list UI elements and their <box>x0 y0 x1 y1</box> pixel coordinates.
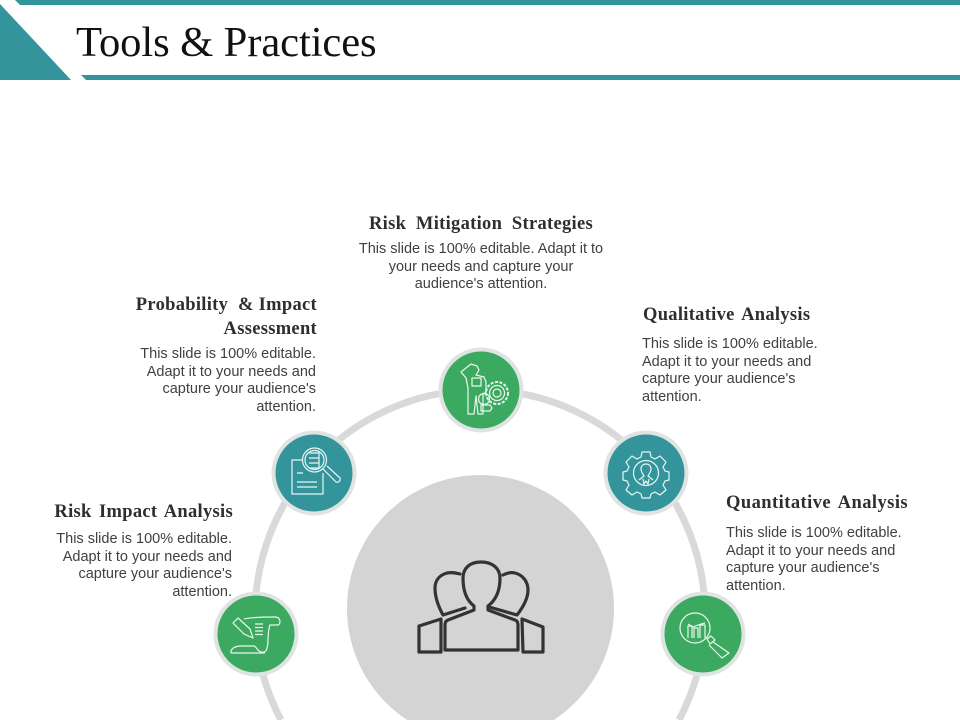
icon: person with gears <box>461 364 508 414</box>
label: risk impact analysis: Risk Impact Analysis <box>54 502 233 522</box>
header decoration <box>0 0 960 80</box>
label: probability and impact assessment: This slide is 100% editable. <box>140 346 316 362</box>
label: qualitative analysis <box>642 305 818 405</box>
label: risk mitigation strategies: audience's attention. <box>415 276 547 292</box>
icon: document with magnifier <box>292 448 340 494</box>
label: risk impact analysis <box>54 502 233 600</box>
node: qualitative analysis <box>604 430 688 516</box>
label: risk impact analysis: capture your audience's <box>78 566 232 582</box>
label: risk mitigation strategies <box>359 214 603 292</box>
label: quantitative analysis: Adapt it to your needs and <box>726 543 895 559</box>
node: risk mitigation strategies <box>438 348 524 432</box>
icon: chart under magnifier <box>680 613 729 658</box>
node: risk impact analysis <box>214 592 298 676</box>
central circle <box>347 475 614 720</box>
label: probability and impact assessment: Adapt it to your needs and <box>147 364 316 380</box>
label: risk mitigation strategies: Risk Mitigation Strategies <box>369 214 593 234</box>
node: quantitative analysis <box>660 592 746 676</box>
label: risk impact analysis: This slide is 100% editable. <box>56 531 232 547</box>
label: qualitative analysis: Qualitative Analysis <box>643 305 810 325</box>
title: Tools & Practices <box>76 18 377 66</box>
label: risk impact analysis: attention. <box>172 584 232 600</box>
label: quantitative analysis: capture your audience's <box>726 560 880 576</box>
label: risk mitigation strategies: This slide is 100% editable. Adapt it to <box>359 241 603 257</box>
label: risk mitigation strategies: your needs and capture your <box>389 259 573 275</box>
icon: scroll and pen <box>231 617 280 653</box>
label: quantitative analysis: Quantitative Analysis <box>726 493 908 513</box>
label: qualitative analysis: Adapt it to your needs and <box>642 354 811 370</box>
label: probability and impact assessment: capture your audience's <box>162 381 316 397</box>
label: risk impact analysis: Adapt it to your needs and <box>63 549 232 565</box>
label: qualitative analysis: This slide is 100% editable. <box>642 336 818 352</box>
label: probability and impact assessment: Probability & Impact <box>136 295 317 315</box>
label: quantitative analysis: attention. <box>726 578 786 594</box>
label: quantitative analysis <box>726 493 908 594</box>
label: qualitative analysis: attention. <box>642 389 702 405</box>
label: probability and impact assessment: Assessment <box>224 319 317 339</box>
outer ring <box>255 390 705 720</box>
label: quantitative analysis: This slide is 100% editable. <box>726 525 902 541</box>
label: qualitative analysis: capture your audience's <box>642 371 796 387</box>
label: probability and impact assessment: attention. <box>256 399 316 415</box>
node: probability and impact assessment <box>272 430 356 516</box>
icon: gear with head <box>623 452 669 498</box>
label: probability and impact assessment <box>136 295 317 415</box>
icon: team of people <box>419 562 543 652</box>
